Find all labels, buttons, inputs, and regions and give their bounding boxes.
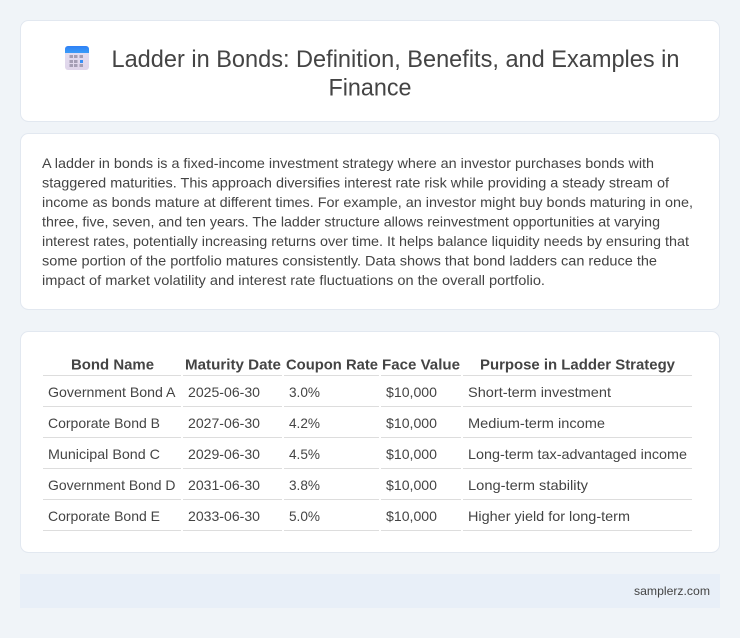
row: Municipal Bond C: [48, 446, 687, 462]
row: Corporate Bond B: [48, 415, 605, 431]
row: Government Bond A: $10,000: [386, 384, 437, 400]
panel: bond table: [20, 332, 720, 552]
row: Corporate Bond E: [48, 508, 630, 524]
row: Corporate Bond B: Corporate Bond B: [48, 415, 160, 431]
description text: impact of market volatility and interest rate fluctuations on the overall portfolio.: [42, 272, 545, 288]
description text: income as bonds mature at different times. For example, an investor might buy bonds maturing in one,: [42, 194, 693, 210]
row: Government Bond D: $10,000: [386, 477, 437, 493]
title: Ladder in Bonds: Definition, Benefits, and Examples in: [112, 46, 680, 73]
row: Government Bond A: Short-term investment: [468, 384, 611, 400]
description text: interest rates, potentially increasing returns over time. It helps balance liquidity needs by ensuring that: [42, 233, 689, 249]
row: Corporate Bond B: 4.2%: [289, 415, 320, 431]
title: [112, 46, 680, 102]
table header: Purpose in Ladder Strategy: [480, 356, 676, 374]
panel: title card: [20, 20, 720, 122]
row: Municipal Bond C: 2029-06-30: [188, 446, 260, 462]
row: Corporate Bond B: 2027-06-30: [188, 415, 260, 431]
table header: Maturity Date: [185, 356, 281, 374]
row: Government Bond D: 2031-06-30: [188, 477, 260, 493]
row: Government Bond A: [48, 384, 611, 400]
description text: staggered maturities. This approach diversifies interest rate risk while providing a steady stream of: [42, 174, 669, 190]
footer: samplerz.com: [634, 584, 710, 598]
row: Municipal Bond C: Municipal Bond C: [48, 446, 160, 462]
row: Corporate Bond E: Corporate Bond E: [48, 508, 160, 524]
description text: A ladder in bonds is a fixed-income investment strategy where an investor purchases bonds with: [42, 155, 654, 171]
row: Corporate Bond E: 5.0%: [289, 508, 320, 524]
row: Government Bond D: Long-term stability: [468, 477, 588, 493]
table header: Bond Name: [71, 356, 154, 374]
row: Government Bond D: 3.8%: [289, 477, 320, 493]
row: Government Bond A: 3.0%: [289, 384, 320, 400]
description text: three, five, seven, and ten years. The ladder structure allows reinvestment opportunities at varying: [42, 214, 660, 230]
row: Government Bond D: [48, 477, 588, 493]
panel: description: [20, 134, 720, 310]
icon: calendar: [65, 46, 89, 70]
table header: Face Value: [382, 356, 460, 374]
description text: [42, 155, 693, 288]
row: Government Bond A: Government Bond A: [48, 384, 176, 400]
row: Municipal Bond C: 4.5%: [289, 446, 320, 462]
row: Government Bond D: Government Bond D: [48, 477, 176, 493]
row: Corporate Bond B: Medium-term income: [468, 415, 605, 431]
row: Government Bond A: 2025-06-30: [188, 384, 260, 400]
title: Finance: [328, 74, 412, 102]
description text: some portion of the portfolio matures consistently. Data shows that bond ladders can reduce the: [42, 252, 657, 268]
table header: [71, 356, 676, 374]
row: Corporate Bond E: Higher yield for long-term: [468, 508, 630, 524]
row: Municipal Bond C: Long-term tax-advantaged income: [468, 446, 687, 462]
table header: Coupon Rate: [286, 356, 378, 374]
row: Corporate Bond E: 2033-06-30: [188, 508, 260, 524]
footer: [20, 574, 720, 608]
row: Municipal Bond C: $10,000: [386, 446, 437, 462]
row: Corporate Bond B: $10,000: [386, 415, 437, 431]
row: Corporate Bond E: $10,000: [386, 508, 437, 524]
